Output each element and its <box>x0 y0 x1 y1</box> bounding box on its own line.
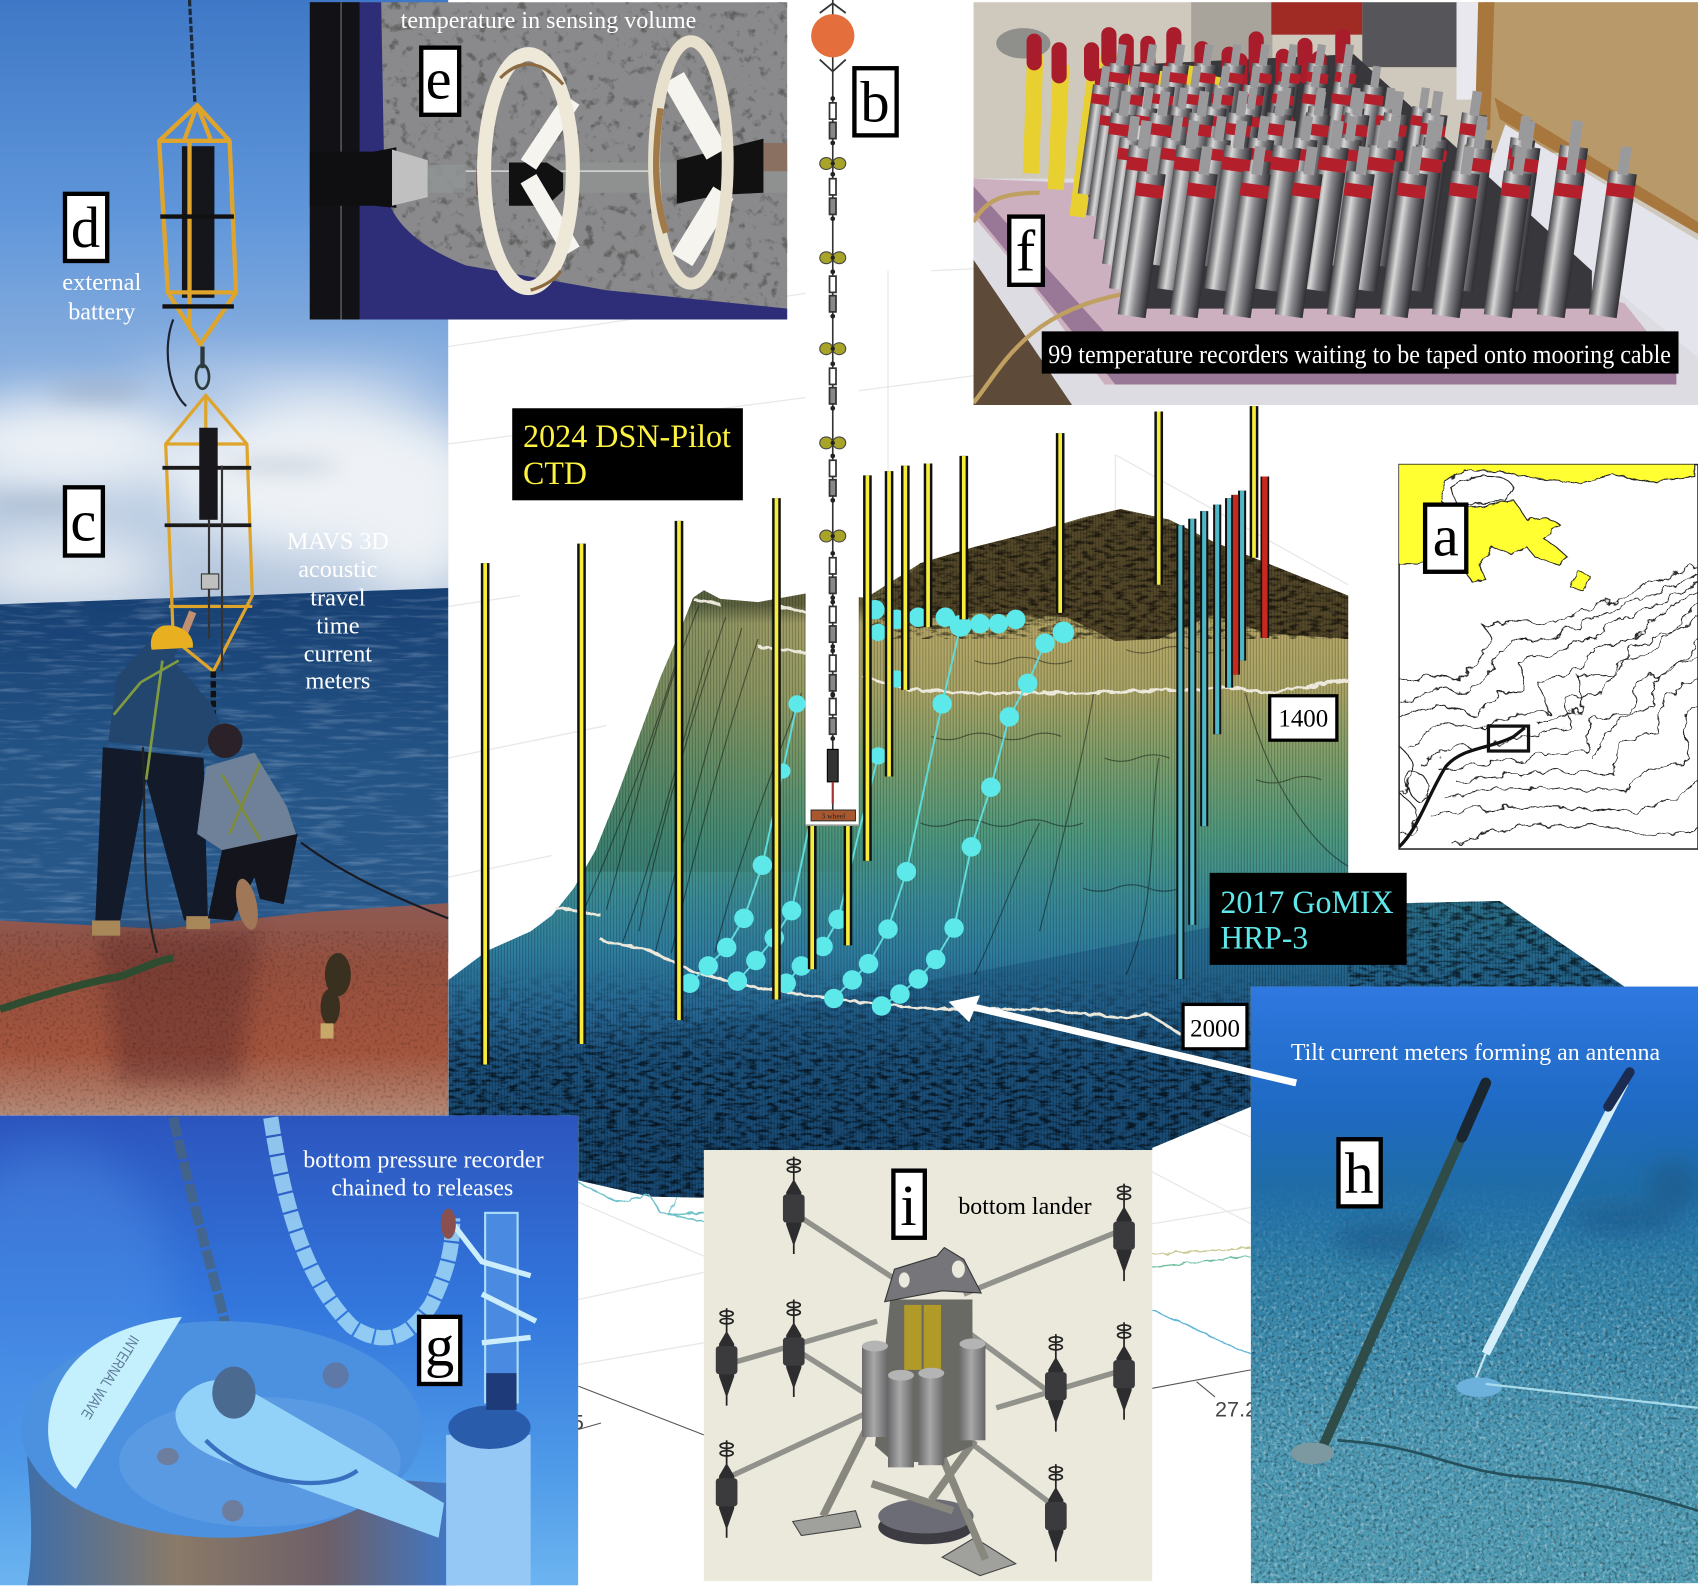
label i <box>893 1171 925 1238</box>
caption: bottom pressure recorder chained to releases <box>303 1150 544 1196</box>
caption: MAVS 3D acoustic travel time current meters: acoustic <box>298 557 377 583</box>
panel h: tilt current meters photo <box>1251 987 1698 1588</box>
encrusted recovered gear <box>321 953 351 1039</box>
label b <box>854 68 897 135</box>
seafloor contour lines <box>578 1183 1251 1354</box>
caption: MAVS 3D acoustic travel time current meters: time <box>316 614 360 640</box>
instrument pods <box>716 1157 1135 1562</box>
lander feet <box>793 1511 1016 1576</box>
depth label 1400 <box>1270 696 1337 740</box>
panel c and d: MAVS photo <box>0 0 476 1115</box>
lander ballast disc <box>878 1499 974 1544</box>
label b: b <box>860 69 890 134</box>
red moorings <box>1236 476 1265 675</box>
anchor barrel: INTERNAL WAVE <box>77 1332 142 1422</box>
chart axes <box>578 1370 1251 1435</box>
label g <box>419 1314 460 1384</box>
anchor weight <box>811 810 855 821</box>
bathymetric contours <box>1392 563 1698 843</box>
caption: MAVS 3D acoustic travel time current meters: meters <box>305 669 370 695</box>
label: 2017 GoMIX HRP-3 <box>1210 873 1407 965</box>
label f <box>1009 217 1043 285</box>
label d <box>65 194 107 261</box>
anchor barrel <box>22 1317 455 1585</box>
isobath lines <box>554 599 1348 1034</box>
coastline land <box>1392 460 1695 590</box>
yellow and red tagged recorders <box>1031 35 1343 217</box>
antenna tilt meter dots <box>680 600 1074 1016</box>
panel b: mooring diagram <box>806 0 859 825</box>
panel i: bottom lander <box>704 1150 1152 1581</box>
3D bathymetry chart <box>448 406 1640 1435</box>
study area box <box>1488 726 1529 751</box>
caption: 99 temperature recorders <box>1042 331 1679 374</box>
tether cable on deck <box>301 843 448 918</box>
shadow between recorders <box>1083 54 1592 309</box>
lander central body <box>862 1248 985 1467</box>
person standing <box>92 612 222 953</box>
upper rig frame d <box>159 0 236 406</box>
ring one <box>484 54 573 290</box>
background plot grid <box>448 260 1348 1364</box>
antenna chain lines <box>690 626 1063 1006</box>
label e: e <box>426 47 452 112</box>
caption: external battery <box>62 270 142 325</box>
panel e: sensing volume photo <box>310 2 787 319</box>
label g: g <box>425 1314 454 1379</box>
caption: bottom lander: bottom lander <box>958 1194 1092 1220</box>
recorder rows <box>1078 43 1640 318</box>
caption: MAVS 3D acoustic travel time current meters: current <box>304 642 372 668</box>
label a: a <box>1433 504 1459 569</box>
ring two <box>654 41 728 284</box>
label: 2024 DSN-Pilot CTD: CTD <box>523 456 587 492</box>
depth label 2000 <box>1183 1004 1247 1049</box>
panel a: location map <box>1392 460 1698 849</box>
caption: bottom pressure recorder chained to releases: chained to releases <box>331 1176 513 1202</box>
caption: external battery: battery <box>68 299 135 325</box>
orange buoy <box>811 3 854 71</box>
arrow to antenna <box>949 995 1296 1083</box>
instrument chain <box>820 96 846 804</box>
label d: d <box>71 195 100 260</box>
terrain surface <box>448 498 1640 1213</box>
seabed cables <box>1337 1384 1698 1511</box>
label: 2024 DSN-Pilot CTD: 2024 DSN-Pilot <box>523 419 731 455</box>
label h: h <box>1344 1140 1374 1205</box>
shelf board <box>974 179 1676 384</box>
label i: i <box>900 1173 917 1238</box>
label: 2024 DSN-Pilot CTD <box>512 408 743 500</box>
label h <box>1338 1139 1381 1206</box>
GoMIX cyan moorings <box>1180 491 1242 979</box>
dark tilt meter <box>1291 1083 1486 1464</box>
label a <box>1425 504 1466 572</box>
lower rig frame c <box>162 395 252 726</box>
caption: MAVS 3D acoustic travel time current meters: travel <box>310 585 366 611</box>
caption: bottom pressure recorder chained to releases: bottom pressure recorder <box>303 1147 544 1173</box>
dark chain <box>168 1116 230 1322</box>
release post <box>441 1209 536 1585</box>
label: 2017 GoMIX HRP-3: 2017 GoMIX <box>1220 885 1394 921</box>
shelf break track <box>1399 728 1525 847</box>
lander arms <box>727 1213 1124 1507</box>
light chain <box>271 1118 453 1338</box>
panel f: temperature recorders photo <box>974 2 1698 405</box>
axis tick label: 27.2 <box>1215 1396 1257 1421</box>
person kneeling <box>197 723 298 932</box>
white tilt meter <box>1457 1072 1630 1397</box>
panel g: bottom pressure recorder photo <box>0 1115 578 1585</box>
label c <box>65 487 103 556</box>
caption: tilt current meters: Tilt current meters forming an antenna <box>1291 1040 1661 1066</box>
depth label 2000: 2000 <box>1190 1015 1240 1042</box>
label c: c <box>70 488 96 553</box>
caption: external battery: external <box>62 270 142 296</box>
DSN-Pilot yellow moorings <box>485 406 1254 1065</box>
caption: MAVS 3D acoustic travel time current meters: MAVS 3D <box>287 529 389 555</box>
label e <box>421 47 459 115</box>
caption: MAVS 3D acoustic travel time current meters <box>287 529 389 695</box>
anchor weight: 3 wheel <box>821 812 845 821</box>
label: 2017 GoMIX HRP-3: HRP-3 <box>1220 921 1308 957</box>
label f: f <box>1016 219 1036 284</box>
axis tick label: 85 <box>560 1409 584 1434</box>
depth label 1400: 1400 <box>1278 706 1328 733</box>
green strap on deck <box>0 958 173 1009</box>
caption: temperature in sensing volume: temperature in sensing volume <box>401 8 696 34</box>
sensor rod <box>310 139 787 208</box>
